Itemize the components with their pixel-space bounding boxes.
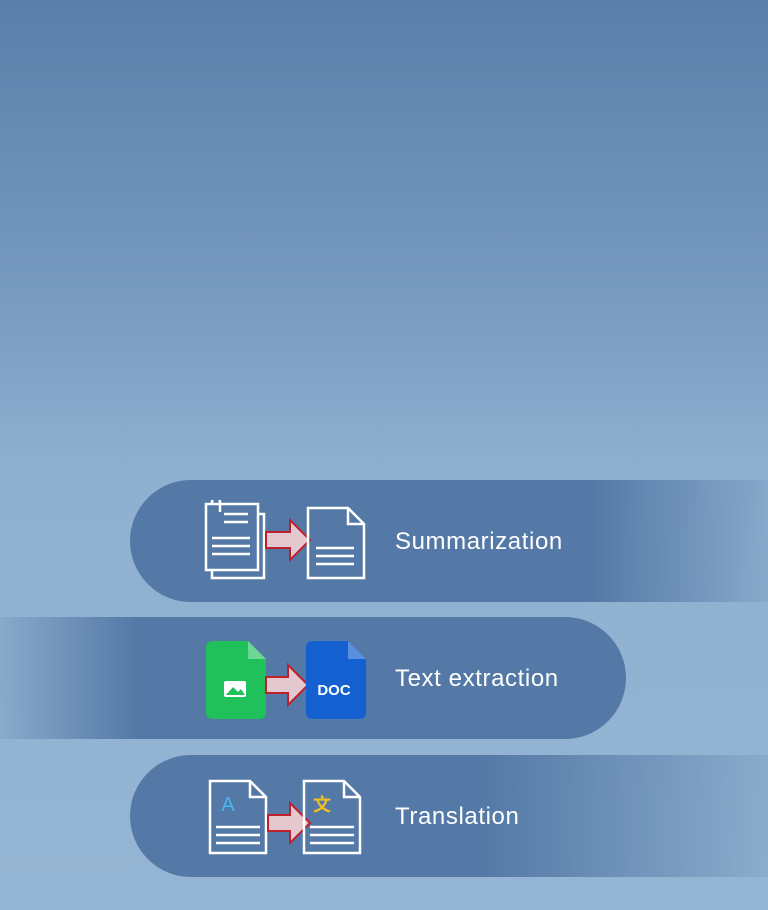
label: Text extraction: Text extraction bbox=[395, 665, 559, 692]
bar: text extraction bbox=[0, 617, 626, 739]
bar: translation bbox=[130, 755, 768, 877]
icon: image to doc bbox=[206, 641, 366, 719]
icon: summarization bbox=[204, 500, 366, 580]
icon: translation: A bbox=[221, 794, 235, 816]
icon: translation: 文 bbox=[313, 791, 331, 817]
label: Translation: Translation bbox=[395, 803, 519, 830]
label: Summarization: Summarization bbox=[395, 528, 563, 555]
icon: image to doc: DOC bbox=[317, 682, 351, 699]
bar: summarization bbox=[130, 480, 768, 602]
icon: translation bbox=[208, 780, 362, 854]
